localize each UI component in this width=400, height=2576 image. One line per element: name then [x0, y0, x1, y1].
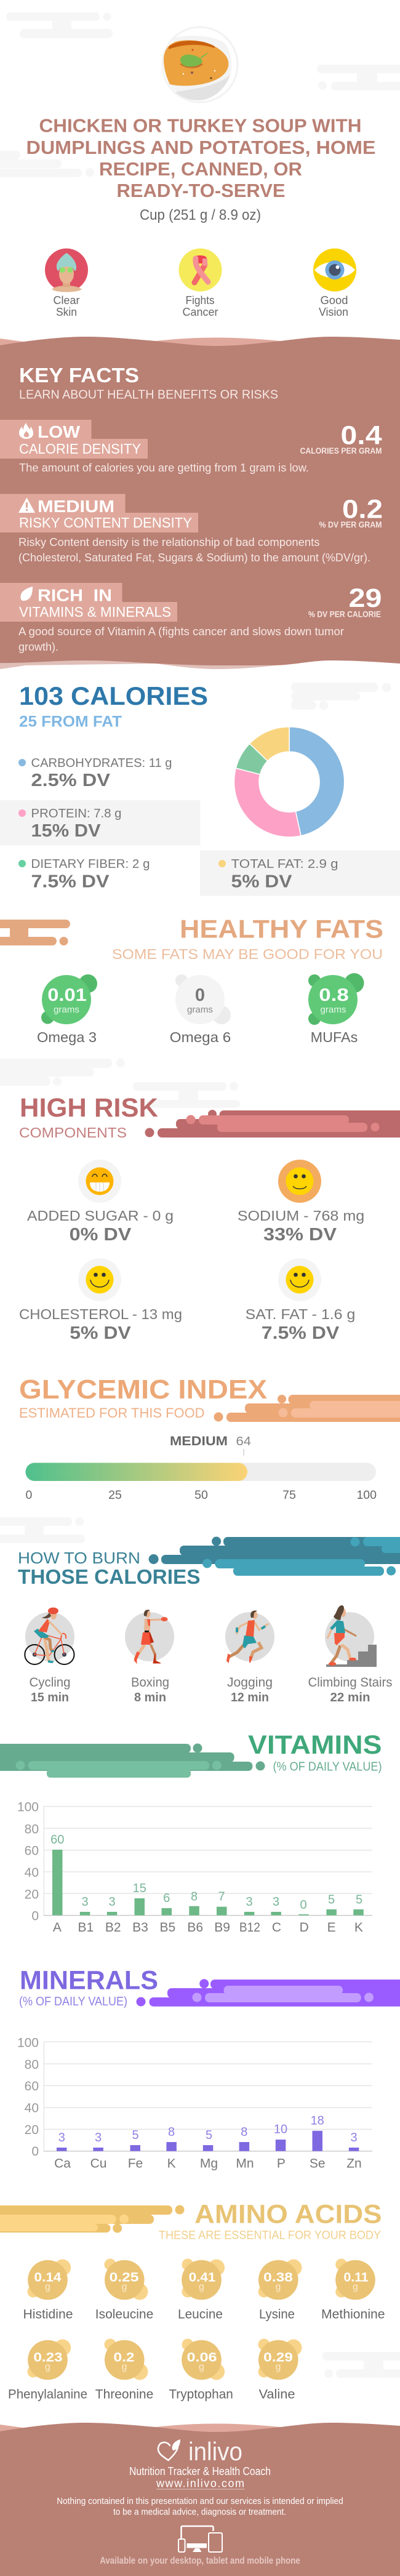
disclaimer: to be a medical advice, diagnosis or treatment.	[113, 2507, 286, 2518]
bar chart: vitamins: B9	[214, 1920, 230, 1935]
legend: protein: PROTEIN: 7.8 g	[31, 807, 122, 821]
title: RECIPE, CANNED, OR	[99, 158, 302, 180]
bar chart: vitamins: 15	[133, 1882, 146, 1895]
legend: carbohydrates	[18, 756, 172, 790]
amino acid: lysine: Lysine	[259, 2308, 295, 2322]
bar chart: minerals: 40	[25, 2101, 39, 2116]
decorative blob: high risk	[145, 1110, 400, 1138]
amino acid: phenylalanine: g	[45, 2362, 50, 2372]
benefit label: good vision: Good	[320, 294, 348, 307]
glycemic index heading: ESTIMATED FOR THIS FOOD	[19, 1405, 204, 1421]
glycemic index gauge: MEDIUM	[170, 1434, 228, 1448]
fact: rich in vitamins and minerals	[0, 583, 382, 653]
amino acid: phenylalanine: Phenylalanine	[8, 2388, 87, 2402]
bar chart: minerals: Mg	[200, 2157, 218, 2171]
benefit label: good vision	[319, 294, 348, 318]
amino acid: isoleucine: 0.25	[110, 2271, 139, 2285]
nutrient: omega 6: grams	[187, 1005, 213, 1015]
amino acid: leucine: g	[199, 2282, 204, 2292]
legend: dietary fiber: DIETARY FIBER: 2 g	[31, 857, 150, 871]
fact: medium risky content density: RISKY CONTENT DENSITY	[19, 515, 192, 531]
amino acid: leucine	[178, 2259, 225, 2322]
bar chart: vitamins: B12	[239, 1920, 260, 1935]
decorative blob: burn calories	[149, 1536, 400, 1576]
tagline: Nutrition Tracker & Health Coach	[129, 2465, 271, 2478]
bar chart: vitamins: 6	[163, 1892, 170, 1905]
fact: rich in vitamins and minerals: VITAMINS & MINERALS	[19, 604, 171, 620]
benefit label: good vision: Vision	[319, 306, 348, 318]
title	[26, 114, 375, 201]
bar chart: vitamins: 40	[25, 1866, 39, 1880]
bar chart: vitamins: 100	[17, 1800, 39, 1815]
bar chart: vitamins: 3	[273, 1895, 279, 1909]
legend: protein	[0, 800, 201, 846]
risk: cholesterol: CHOLESTEROL - 13 mg	[19, 1306, 182, 1322]
benefit label: fights cancer	[182, 294, 218, 318]
bar chart: vitamins: B2	[105, 1920, 121, 1935]
risk: cholesterol: 5% DV	[70, 1323, 131, 1343]
nutrient: MUFAs	[308, 973, 364, 1045]
activity: cycling: 15 min	[31, 1691, 69, 1704]
icon: flame	[19, 423, 33, 439]
nutrient: omega 3: 0.01	[47, 985, 87, 1005]
fact: rich in vitamins and minerals: A good source of Vitamin A (fights cancer and slows down tumor	[18, 625, 344, 638]
amino acids heading: THESE ARE ESSENTIAL FOR YOUR BODY	[159, 2229, 381, 2242]
amino acids heading: AMINO ACIDS	[194, 2200, 382, 2229]
risk: cholesterol	[19, 1258, 182, 1343]
risk: sodium: 33% DV	[263, 1225, 337, 1245]
activity: jogging: Jogging	[227, 1675, 273, 1690]
bar chart: minerals: 80	[25, 2058, 39, 2072]
risk: added sugar: ADDED SUGAR - 0 g	[27, 1208, 174, 1224]
legend: carbohydrates: 2.5% DV	[31, 771, 111, 790]
healthy fats heading: SOME FATS MAY BE GOOD FOR YOU	[112, 946, 383, 962]
amino acid: lysine: 0.38	[263, 2271, 293, 2285]
glycemic index heading: GLYCEMIC INDEX	[19, 1374, 267, 1405]
bar chart: vitamins: 60	[25, 1844, 39, 1858]
bar chart: minerals: 5	[206, 2129, 212, 2142]
amino acid: valine	[258, 2339, 302, 2402]
amino acid: histidine: g	[45, 2282, 50, 2292]
amino acid: isoleucine: g	[122, 2282, 127, 2292]
key facts heading: KEY FACTS	[19, 364, 139, 387]
bar chart: vitamins: A	[53, 1920, 62, 1935]
glycemic index gauge: 75	[282, 1488, 296, 1502]
fact: rich in vitamins and minerals: % DV PER CALORIE	[308, 609, 381, 619]
nutrient: omega 6: 0	[195, 985, 205, 1005]
amino acid: threonine: Threonine	[95, 2388, 153, 2402]
calories heading: 25 FROM FAT	[19, 713, 122, 730]
panel: key facts	[0, 337, 400, 669]
healthy fats heading	[112, 915, 383, 962]
decorative blob: vitamins	[0, 1743, 265, 1778]
legend: total fat	[200, 851, 400, 896]
risk: saturated fat	[246, 1258, 355, 1343]
fact: medium risky content density	[0, 494, 383, 564]
glycemic index gauge: 64	[236, 1435, 251, 1448]
minerals heading: (% OF DAILY VALUE)	[19, 1995, 127, 2008]
bar chart: vitamins: B3	[132, 1920, 148, 1935]
availability note: Available on your desktop, tablet and mobile phone	[100, 2556, 300, 2566]
key facts heading	[19, 364, 278, 401]
title: DUMPLINGS AND POTATOES, HOME	[26, 137, 375, 158]
donut chart	[234, 727, 345, 837]
minerals heading	[19, 1966, 158, 2008]
bar chart: minerals: 0	[31, 2145, 39, 2159]
legend: total fat: TOTAL FAT: 2.9 g	[231, 857, 338, 871]
fact: medium risky content density: MEDIUM	[38, 497, 114, 516]
nutrient: omega 3: grams	[54, 1005, 79, 1015]
nutrient: omega 3	[37, 974, 97, 1045]
benefit: fights cancer	[178, 249, 222, 292]
bar chart: vitamins: B5	[160, 1920, 175, 1935]
bar chart: minerals: Mn	[236, 2157, 254, 2171]
bar chart: minerals: 8	[241, 2125, 247, 2139]
amino acid: lysine	[258, 2259, 302, 2322]
bar chart: vitamins: 5	[356, 1893, 362, 1906]
fact: rich in vitamins and minerals: 29	[348, 584, 382, 613]
benefit label: clear skin: Skin	[56, 306, 77, 318]
decorative blob: minerals	[137, 1979, 400, 2007]
disclaimer: Nothing contained in this presentation and our services is intended or implied	[57, 2496, 343, 2506]
glycemic index gauge: 100	[356, 1488, 377, 1502]
bar chart: vitamins: D	[300, 1920, 309, 1935]
fact: rich in vitamins and minerals: RICH IN	[38, 586, 112, 604]
high risk heading: COMPONENTS	[19, 1125, 127, 1141]
glycemic index gauge: 25	[108, 1488, 122, 1502]
healthy fats heading: HEALTHY FATS	[180, 915, 383, 943]
bar chart: minerals	[17, 2036, 372, 2171]
risk: sodium: SODIUM - 768 mg	[238, 1208, 364, 1224]
bar chart: vitamins: B1	[78, 1920, 94, 1935]
website link: www.inlivo.com	[156, 2478, 244, 2490]
glycemic index heading	[19, 1374, 267, 1421]
icon: warning triangle	[18, 497, 35, 513]
bar chart: vitamins	[17, 1800, 372, 1935]
fact: low calorie density: CALORIES PER GRAM	[300, 446, 382, 455]
amino acid: tryptophan: 0.06	[187, 2351, 217, 2365]
amino acid: tryptophan: g	[199, 2362, 204, 2372]
bar chart: minerals: 3	[95, 2131, 102, 2145]
title: READY-TO-SERVE	[117, 180, 286, 201]
amino acid: leucine: 0.41	[189, 2271, 216, 2285]
vitamins heading: VITAMINS	[248, 1730, 382, 1760]
decorative blob: healthy fats	[0, 920, 70, 945]
burn calories heading	[18, 1549, 201, 1588]
bar chart: vitamins: E	[327, 1920, 336, 1935]
benefit label: fights cancer: Fights	[186, 294, 214, 307]
decorative blob: glycemic index	[214, 1395, 400, 1422]
burn calories heading: THOSE CALORIES	[18, 1565, 201, 1588]
bar chart: minerals: 10	[274, 2123, 287, 2137]
bar chart: vitamins: K	[354, 1920, 363, 1935]
risk: added sugar: 0% DV	[70, 1225, 132, 1245]
amino acids heading	[159, 2200, 382, 2242]
amino acid: methionine: Methionine	[321, 2308, 385, 2322]
amino acid: isoleucine	[95, 2259, 153, 2322]
activity: climbing stairs	[308, 1605, 393, 1704]
amino acid: lysine: g	[276, 2282, 281, 2292]
fact: low calorie density: CALORIE DENSITY	[19, 441, 141, 457]
bar chart: minerals: Zn	[346, 2157, 362, 2171]
icon: leaf	[20, 587, 33, 601]
legend: total fat: 5% DV	[231, 872, 292, 891]
decorative blob: amino acids	[0, 2205, 185, 2233]
bar chart: minerals: 8	[168, 2125, 175, 2139]
amino acid: tryptophan	[169, 2339, 233, 2402]
bar chart: vitamins: B6	[187, 1920, 203, 1935]
amino acid: methionine	[321, 2259, 385, 2322]
bar chart: vitamins: 5	[328, 1893, 335, 1906]
bar chart: vitamins: 0	[31, 1909, 39, 1923]
bar chart: minerals: Ca	[54, 2157, 71, 2171]
fact: medium risky content density: % DV PER GRAM	[319, 520, 382, 529]
glycemic index gauge: 50	[194, 1488, 208, 1502]
bar chart: vitamins: C	[272, 1920, 281, 1935]
amino acid: histidine: 0.14	[34, 2271, 62, 2285]
amino acid: threonine: 0.2	[113, 2351, 134, 2365]
benefit label: clear skin	[53, 294, 80, 318]
bar chart: vitamins: 7	[218, 1890, 225, 1903]
fact: medium risky content density: Risky Content density is the relationship of bad components	[18, 536, 320, 548]
amino acid: histidine	[23, 2259, 73, 2322]
activity: boxing: 8 min	[134, 1691, 166, 1704]
footer panel	[0, 2423, 400, 2576]
fact: medium risky content density: (Cholesterol, Saturated Fat, Sugars & Sodium) to the amount (%DV/gr).	[18, 552, 370, 564]
amino acid: methionine: g	[353, 2282, 358, 2292]
bar chart: vitamins: 3	[108, 1895, 116, 1909]
amino acid: isoleucine: Isoleucine	[95, 2308, 153, 2322]
risk: saturated fat: SAT. FAT - 1.6 g	[246, 1306, 355, 1322]
calories heading	[19, 681, 208, 730]
amino acid: phenylalanine	[8, 2339, 87, 2402]
amino acid: threonine: g	[122, 2362, 127, 2372]
fact: low calorie density: 0.4	[341, 421, 382, 451]
bar chart: vitamins: 3	[81, 1895, 89, 1909]
legend: dietary fiber: 7.5% DV	[31, 872, 110, 891]
bar chart: vitamins: 80	[25, 1822, 39, 1836]
food photo: soup bowl	[162, 27, 238, 102]
bar chart: minerals: K	[167, 2157, 176, 2171]
benefit label: fights cancer: Cancer	[182, 306, 218, 318]
bar chart: minerals: 20	[25, 2123, 39, 2137]
benefit: clear skin	[45, 249, 88, 292]
legend: carbohydrates: CARBOHYDRATES: 11 g	[31, 756, 172, 770]
key facts heading: LEARN ABOUT HEALTH BENEFITS OR RISKS	[19, 388, 278, 401]
nutrient: MUFAs: MUFAs	[311, 1029, 358, 1045]
amino acid: tryptophan: Tryptophan	[169, 2388, 233, 2402]
benefit: good vision	[313, 249, 356, 292]
bar chart: minerals: 60	[25, 2079, 39, 2093]
risk: added sugar	[27, 1160, 174, 1245]
fact: low calorie density: LOW	[38, 422, 81, 441]
high risk heading: HIGH RISK	[20, 1093, 158, 1123]
glycemic index gauge	[26, 1434, 377, 1502]
nutrient: omega 6	[170, 974, 231, 1045]
activity: boxing	[125, 1610, 174, 1704]
minerals heading: MINERALS	[20, 1966, 158, 1996]
vitamins heading: (% OF DAILY VALUE)	[273, 1760, 382, 1774]
bar chart: vitamins: 3	[246, 1895, 253, 1909]
legend: dietary fiber	[18, 857, 150, 891]
fact: low calorie density	[0, 420, 382, 474]
bar chart: minerals: 100	[17, 2036, 39, 2050]
activity: cycling: Cycling	[30, 1675, 70, 1690]
bar chart: minerals: Se	[310, 2157, 326, 2171]
disclaimer	[57, 2496, 343, 2518]
activity: boxing: Boxing	[131, 1675, 169, 1690]
risk: saturated fat: 7.5% DV	[262, 1323, 340, 1343]
activity: climbing stairs: 22 min	[330, 1691, 370, 1704]
nutrient: MUFAs: 0.8	[319, 985, 349, 1005]
activity: jogging	[225, 1610, 274, 1704]
amino acid: methionine: 0.11	[343, 2271, 369, 2285]
amino acid: valine: 0.29	[263, 2351, 293, 2365]
risk: sodium	[238, 1160, 364, 1245]
title: CHICKEN OR TURKEY SOUP WITH	[39, 114, 362, 137]
legend: protein: 15% DV	[31, 821, 101, 841]
bar chart: minerals: P	[277, 2157, 286, 2171]
bar chart: vitamins: 8	[191, 1890, 198, 1903]
serving size: Cup (251 g / 8.9 oz)	[140, 207, 261, 223]
logo: inlivo	[158, 2437, 242, 2466]
fact: rich in vitamins and minerals: growth).	[18, 641, 58, 653]
fact: medium risky content density: 0.2	[342, 495, 383, 524]
fact: low calorie density: The amount of calories you are getting from 1 gram is low.	[19, 462, 309, 474]
amino acid: threonine	[95, 2339, 153, 2402]
bar chart: minerals: Fe	[128, 2157, 143, 2171]
amino acid: valine: Valine	[258, 2388, 295, 2402]
nutrient: omega 6: Omega 6	[170, 1029, 231, 1045]
calories heading: 103 CALORIES	[19, 681, 208, 710]
logo: inlivo: inlivo	[188, 2437, 242, 2466]
benefit label: clear skin: Clear	[53, 294, 80, 307]
nutrient: MUFAs: grams	[320, 1005, 346, 1015]
activity: cycling	[25, 1608, 74, 1704]
amino acid: histidine: Histidine	[23, 2308, 73, 2322]
glycemic index gauge: 0	[26, 1488, 32, 1502]
amino acid: leucine: Leucine	[178, 2308, 223, 2322]
bar chart: minerals: Cu	[90, 2157, 106, 2171]
nutrient: omega 3: Omega 3	[37, 1029, 97, 1045]
bar chart: minerals: 18	[311, 2114, 324, 2128]
bar chart: minerals: 3	[350, 2131, 358, 2145]
icon: devices	[178, 2526, 222, 2552]
bar chart: vitamins: 60	[50, 1833, 64, 1847]
bar chart: vitamins: 20	[25, 1887, 39, 1901]
vitamins heading	[248, 1730, 382, 1774]
bar chart: minerals: 3	[58, 2131, 65, 2145]
high risk heading	[19, 1093, 158, 1141]
activity: climbing stairs: Climbing Stairs	[308, 1675, 393, 1690]
burn calories heading: HOW TO BURN	[18, 1549, 140, 1567]
activity: jogging: 12 min	[231, 1691, 269, 1704]
bar chart: minerals: 5	[132, 2129, 139, 2142]
amino acid: valine: g	[276, 2362, 281, 2372]
bar chart: vitamins: 0	[300, 1898, 307, 1912]
amino acid: phenylalanine: 0.23	[33, 2351, 63, 2365]
